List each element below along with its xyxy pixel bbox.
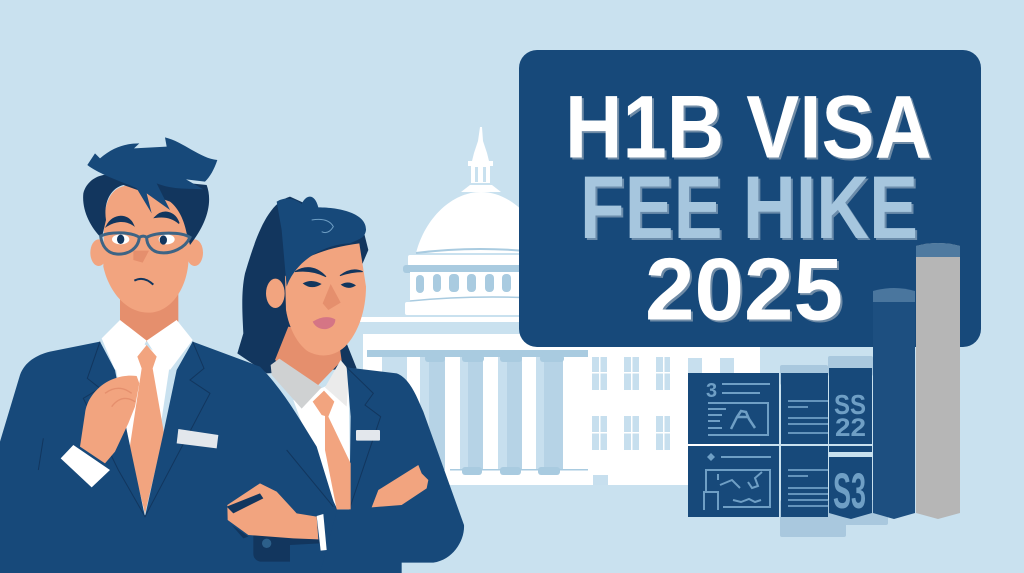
title line: H1B VISA: H1B VISA xyxy=(565,76,932,176)
man shirt and collar xyxy=(102,320,193,513)
man suit xyxy=(0,342,337,573)
man back hair xyxy=(83,175,209,245)
title line: FEE HIKE: FEE HIKE xyxy=(582,159,920,259)
back sheets xyxy=(780,356,888,537)
man figure xyxy=(0,137,337,573)
man lapels xyxy=(38,342,333,517)
document sheet right: SS xyxy=(834,389,866,420)
woman ear xyxy=(266,279,285,308)
capitol spire and lantern xyxy=(461,127,501,192)
man top hair xyxy=(87,137,217,213)
woman ponytail hair xyxy=(237,197,368,373)
documents panel group xyxy=(688,356,888,537)
woman face xyxy=(285,243,366,355)
woman figure xyxy=(233,197,464,573)
woman hair top xyxy=(277,197,366,287)
man ears xyxy=(90,239,203,266)
document sheet middle xyxy=(781,373,828,517)
woman suit xyxy=(233,367,464,573)
document sheet top left xyxy=(688,373,779,444)
man mouth xyxy=(134,279,153,285)
bar chart: rising columns xyxy=(873,243,960,519)
man tie xyxy=(129,345,164,513)
title line: H1B VISA: H1B VISA xyxy=(567,78,934,178)
man glasses xyxy=(101,233,190,254)
man hand xyxy=(80,376,139,463)
woman eyes xyxy=(303,281,356,288)
man cuff xyxy=(61,445,110,487)
woman shirt and collar xyxy=(293,370,351,509)
woman nose xyxy=(323,284,341,310)
woman cuff xyxy=(317,514,327,551)
woman left hand xyxy=(227,483,318,539)
woman lips xyxy=(313,317,335,329)
man neck xyxy=(120,293,178,342)
capitol colonnade xyxy=(363,334,760,485)
woman crossed arms xyxy=(227,465,428,562)
illustration: two professionals xyxy=(0,137,464,573)
building windows xyxy=(592,357,734,485)
document sheet right: S3 xyxy=(833,463,866,519)
woman tie xyxy=(313,391,351,509)
man eyebrows xyxy=(107,212,179,226)
illustration: capitol building xyxy=(360,127,760,485)
title line: 2025: 2025 xyxy=(647,242,845,340)
panel: title xyxy=(519,50,981,347)
document sheet top left: 3 xyxy=(706,380,717,402)
man face xyxy=(103,185,189,313)
woman neck xyxy=(275,327,342,388)
capitol drum with windows xyxy=(360,255,538,322)
document sheet right: 22 xyxy=(835,414,866,442)
title line: 2025: 2025 xyxy=(645,240,843,338)
man eyes xyxy=(112,234,175,245)
phone in hand xyxy=(253,535,320,562)
woman name badge xyxy=(356,430,380,441)
woman eyebrows xyxy=(295,268,363,277)
bar: grey xyxy=(916,243,960,519)
capitol dome xyxy=(416,192,546,253)
document sheet right xyxy=(829,368,872,519)
bar: dark blue xyxy=(873,288,915,519)
woman right hand xyxy=(372,465,428,507)
man nose xyxy=(133,251,149,263)
title line: FEE HIKE: FEE HIKE xyxy=(580,157,918,257)
man name badge xyxy=(177,429,218,448)
document sheet bottom left xyxy=(688,446,779,517)
